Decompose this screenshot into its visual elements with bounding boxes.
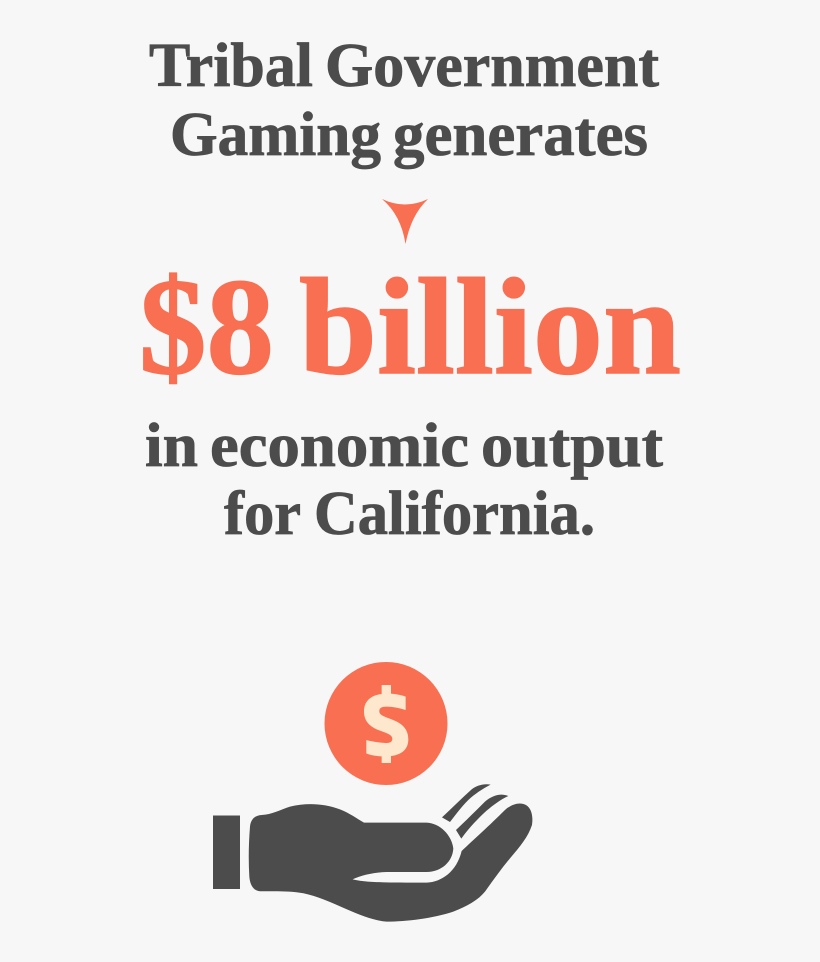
heading: Government [325, 32, 659, 100]
text block: economic output: for [224, 480, 301, 548]
heading [149, 32, 659, 169]
finger [456, 795, 508, 839]
palm and thumb [249, 803, 532, 922]
heading: Gaming [170, 101, 381, 169]
text block: economic output [145, 412, 663, 548]
text block: economic output: in [145, 412, 198, 480]
text block: economic output: California. [314, 480, 595, 548]
big number: billion [299, 250, 681, 403]
big number: $8 [139, 250, 274, 403]
heading: Tribal [149, 32, 313, 100]
big number [139, 250, 681, 403]
icon: arrow pointing down [382, 199, 428, 244]
finger [442, 784, 491, 822]
text block: economic output: output [481, 412, 663, 480]
text block: economic output: economic [210, 412, 469, 480]
coin [324, 662, 448, 785]
dollar sign [364, 685, 408, 763]
icon: hand with coin [213, 662, 532, 922]
cuff [213, 816, 240, 889]
heading: generates [393, 101, 648, 169]
